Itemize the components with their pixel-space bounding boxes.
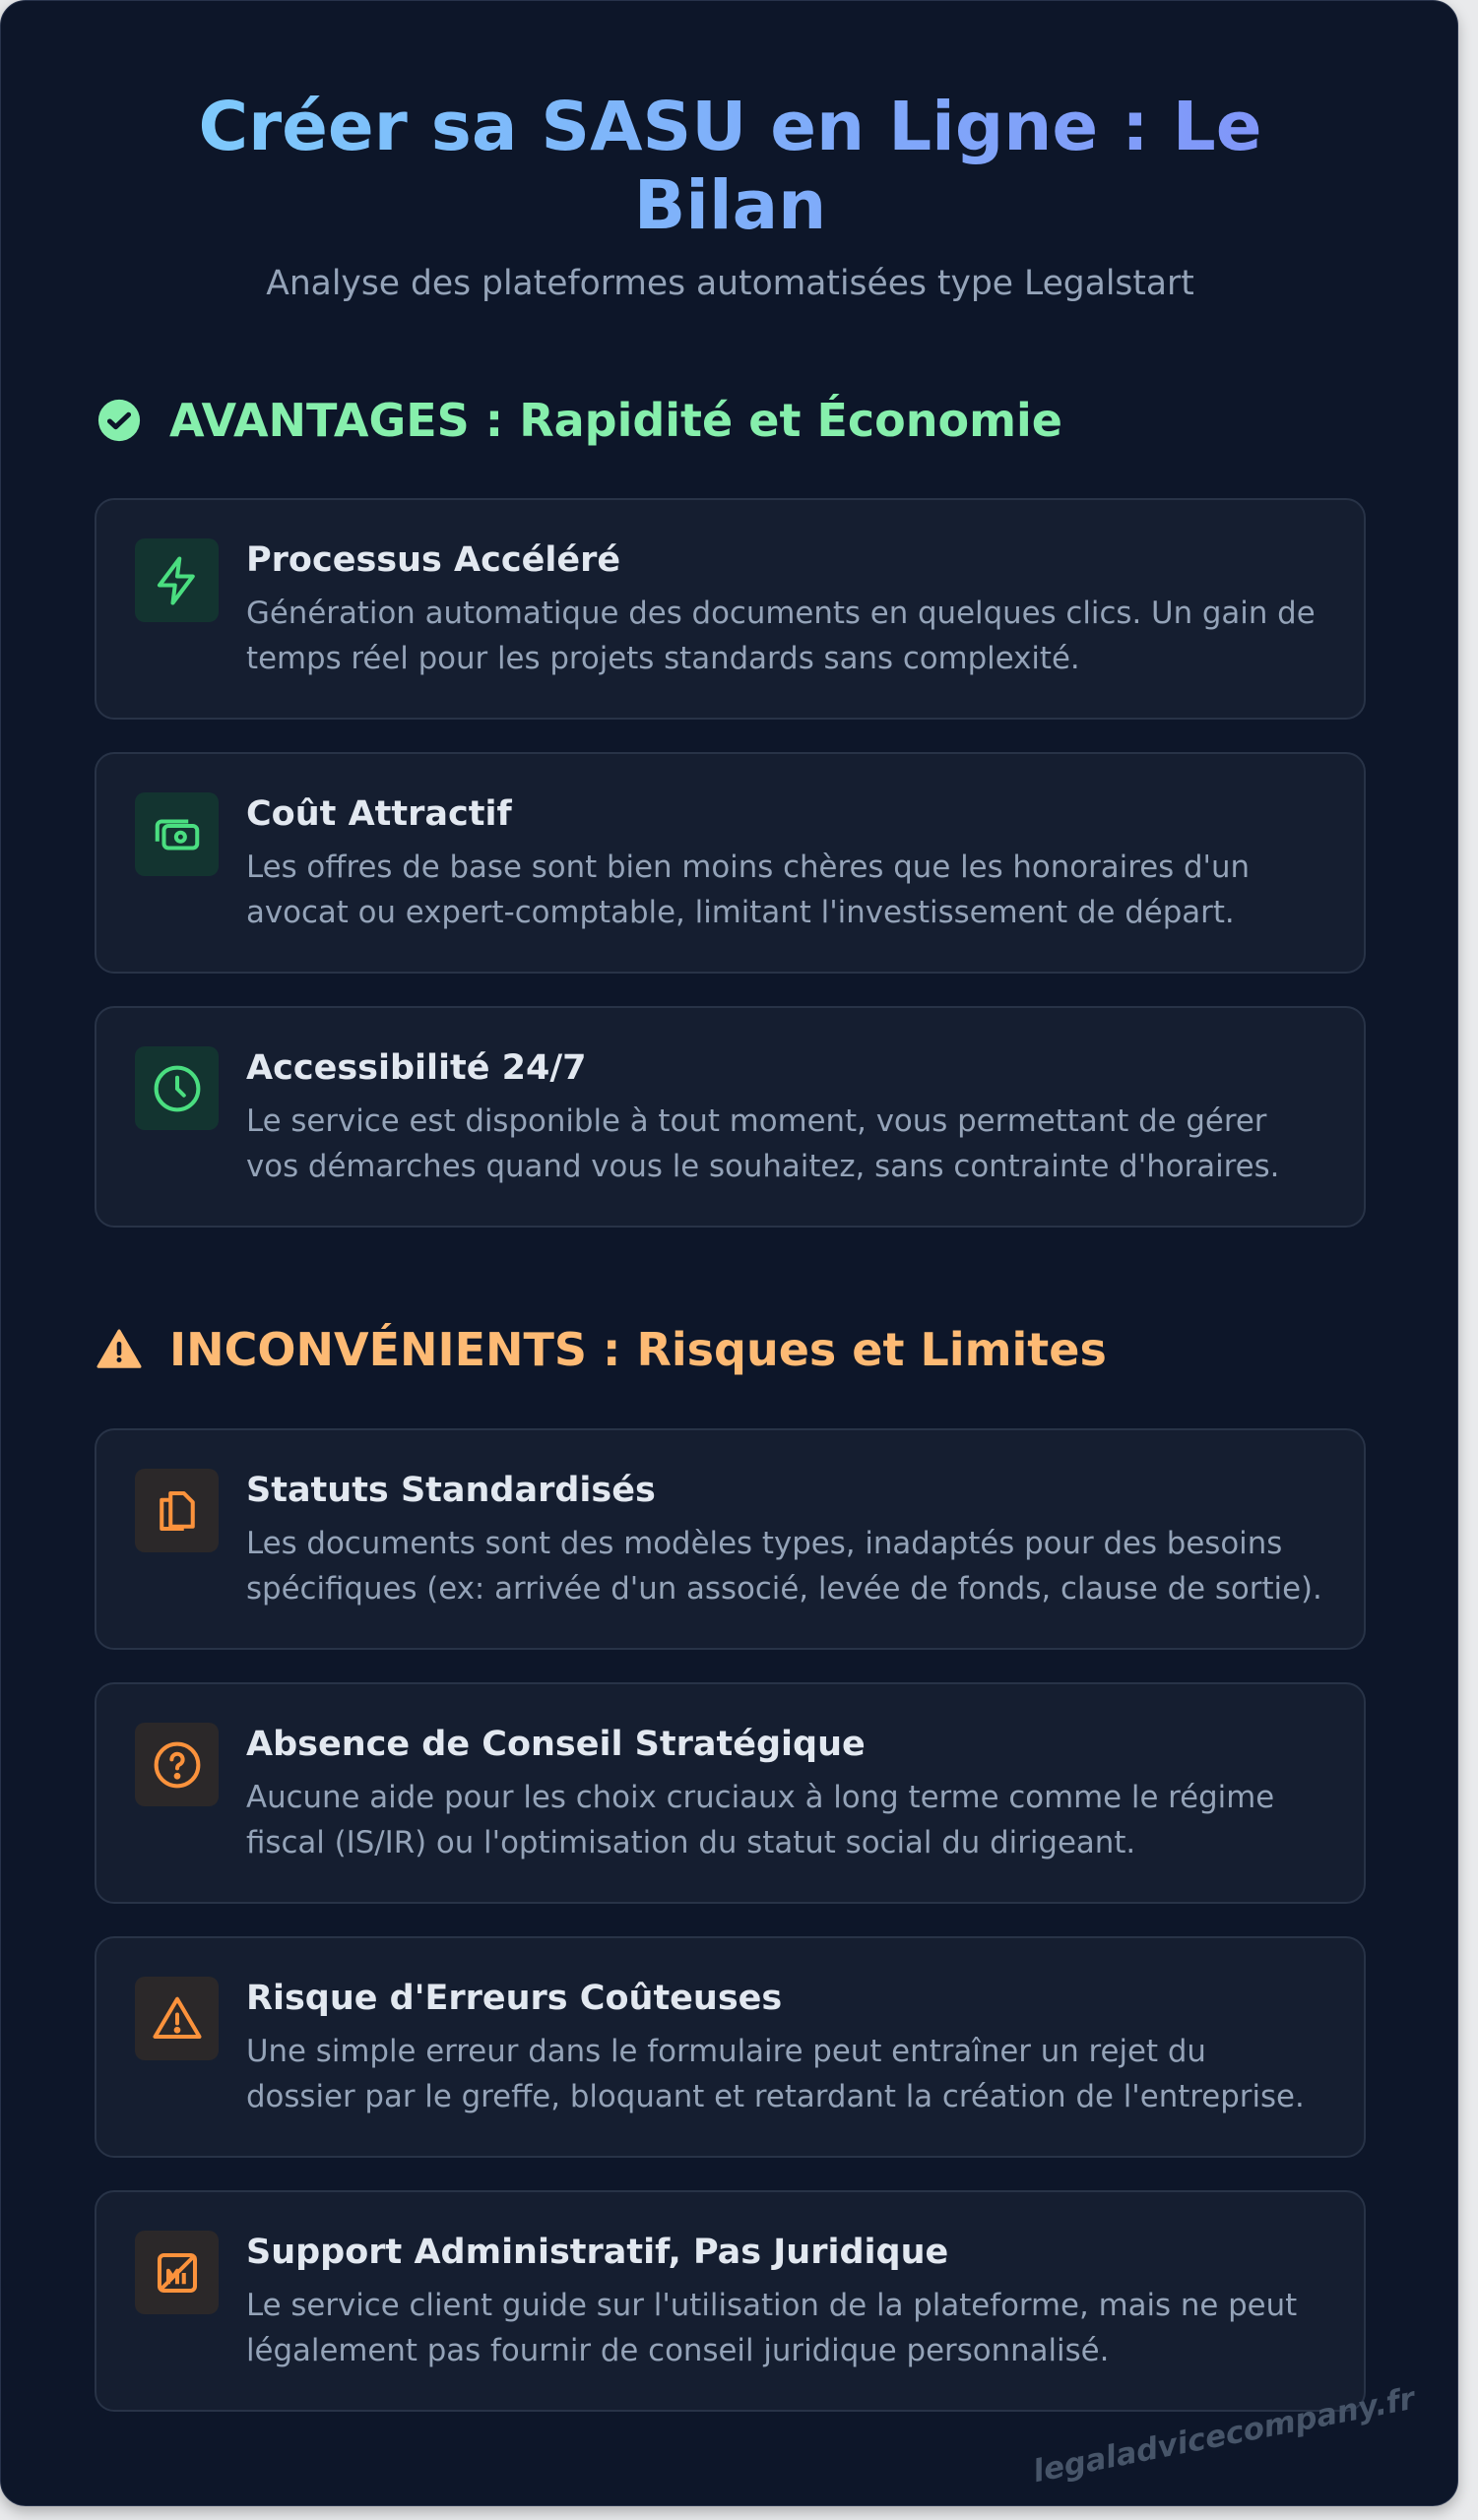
card: statuts standardisés: spécifiques (ex: arrivée d'un associé, levée de fonds, clause de sortie). — [246, 1571, 1322, 1606]
card: accessibilité: Le service est disponible à tout moment, vous permettant de gérer — [246, 1103, 1266, 1139]
card: processus accéléré — [95, 498, 1366, 720]
watermark: legaladvicecompany.fr — [1030, 2381, 1418, 2489]
card: risque d'erreurs: Une simple erreur dans le formulaire peut entraîner un rejet du — [246, 2034, 1206, 2069]
card: processus accéléré: Génération automatique des documents en quelques clics. Un gain de temps réel pour les projets standards sans complexité. — [246, 596, 1316, 676]
card: absence de conseil: Absence de Conseil Stratégique — [246, 1725, 866, 1764]
card: coût attractif — [95, 752, 1366, 974]
card: statuts standardisés — [95, 1428, 1366, 1650]
card: support administratif: Le service client guide sur l'utilisation de la plateforme, mais ne peut — [246, 2288, 1297, 2323]
card: absence de conseil: fiscal (IS/IR) ou l'optimisation du statut social du dirigeant. — [246, 1825, 1135, 1860]
icon: warning — [135, 1977, 219, 2060]
heading: inconvénients: INCONVÉNIENTS : Risques et Limites — [169, 1323, 1107, 1376]
icon: clock — [135, 1046, 219, 1130]
card: risque d'erreurs: dossier par le greffe, bloquant et retardant la création de l'entreprise. — [246, 2079, 1305, 2114]
card: absence de conseil — [95, 1682, 1366, 1904]
card: absence de conseil: Aucune aide pour les choix cruciaux à long terme comme le régime — [246, 1780, 1274, 1815]
title: Créer sa SASU en Ligne : Le — [198, 88, 1262, 166]
title — [1, 88, 1459, 245]
card: accessibilité — [95, 1006, 1366, 1228]
card: risque d'erreurs — [95, 1936, 1366, 2158]
heading: avantages: AVANTAGES : Rapidité et Économie — [169, 394, 1062, 447]
card: accessibilité: Accessibilité 24/7 — [246, 1048, 587, 1088]
card: support administratif: Support Administratif, Pas Juridique — [246, 2233, 948, 2272]
title: Bilan — [634, 166, 826, 245]
card: statuts standardisés: Statuts Standardisés — [246, 1471, 656, 1510]
icon: money — [135, 792, 219, 876]
card: accessibilité: vos démarches quand vous le souhaitez, sans contrainte d'horaires. — [246, 1149, 1279, 1184]
icon: question — [135, 1723, 219, 1806]
subtitle: Analyse des plateformes automatisées type Legalstart — [266, 264, 1194, 303]
card: processus accéléré: Processus Accéléré — [246, 540, 620, 580]
card: support administratif: légalement pas fournir de conseil juridique personnalisé. — [246, 2333, 1109, 2368]
card: statuts standardisés: Les documents sont des modèles types, inadaptés pour des besoins — [246, 1526, 1282, 1561]
card: coût attractif: Coût Attractif — [246, 794, 512, 834]
card: support administratif — [95, 2190, 1366, 2412]
icon: lightning — [135, 538, 219, 622]
icon: documents — [135, 1469, 219, 1552]
card: risque d'erreurs: Risque d'Erreurs Coûteuses — [246, 1979, 782, 2018]
icon: no-legal — [135, 2231, 219, 2314]
card: coût attractif: Les offres de base sont bien moins chères que les honoraires d'un avocat ou expert-comptable, limitant l'investissement de départ. — [246, 850, 1250, 930]
